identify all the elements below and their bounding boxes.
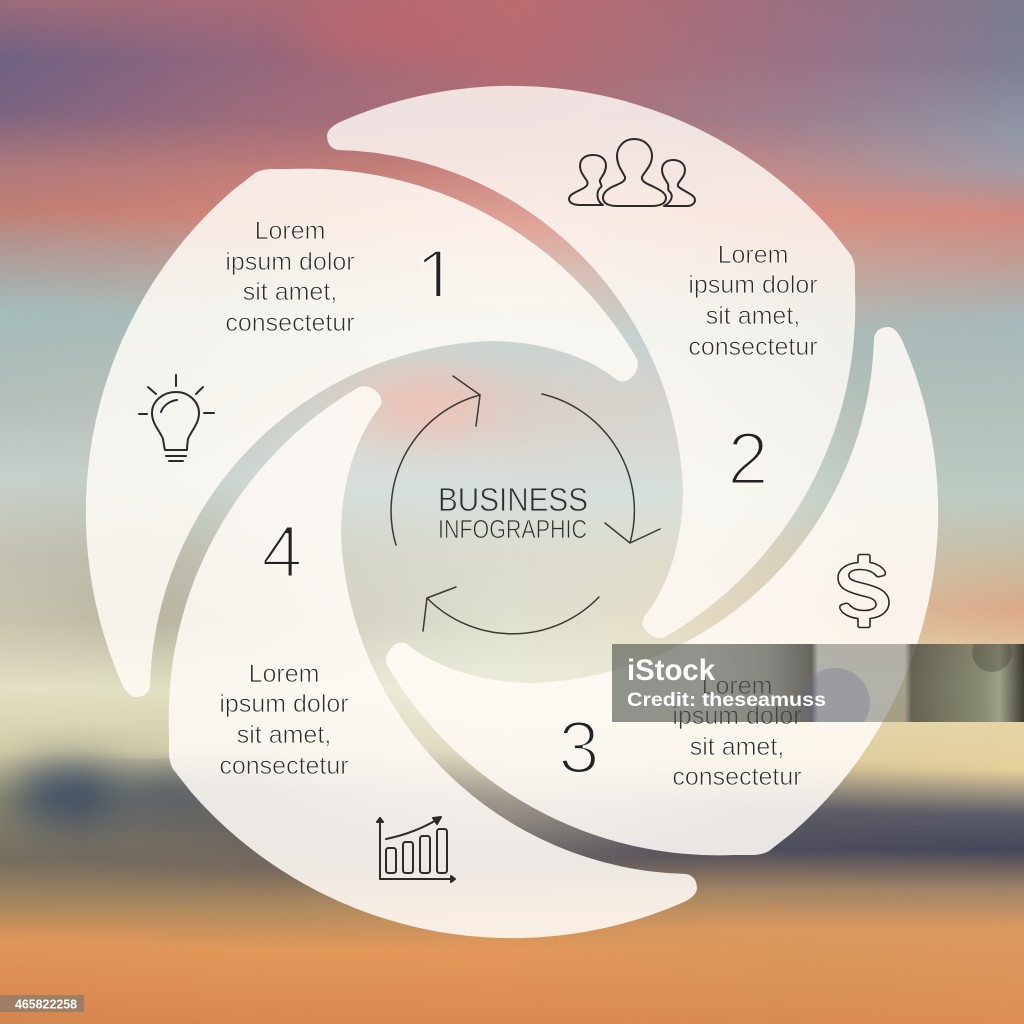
text block 4: sit amet,	[237, 721, 331, 749]
icon: light bulb	[139, 375, 214, 461]
stock id tag	[0, 995, 84, 1012]
cycle arrows	[391, 376, 660, 634]
icon: dollar	[838, 554, 889, 628]
icon: people	[569, 139, 695, 206]
text block 1: consectetur	[225, 309, 355, 337]
number 4: 4	[261, 510, 303, 593]
number 3: 3	[558, 706, 600, 789]
petal 2	[327, 86, 855, 638]
text block 4: consectetur	[219, 752, 349, 780]
petal 4	[169, 386, 697, 938]
arrow: left arc	[391, 376, 480, 545]
centre title	[438, 482, 588, 544]
text block 2: consectetur	[688, 333, 818, 361]
text block 1: Lorem	[255, 217, 325, 245]
text block 3: Lorem	[702, 672, 772, 700]
stock id tag: 465822258	[15, 996, 77, 1012]
text block 4: ipsum dolor	[219, 690, 349, 718]
watermark logo: iStock	[627, 654, 715, 687]
text block 4: Lorem	[249, 660, 319, 688]
text block 1: sit amet,	[243, 278, 337, 306]
title line 2: INFOGRAPHIC	[438, 516, 587, 544]
watermark credit: Credit: theseamuss	[627, 689, 826, 711]
centre glow disc	[142, 142, 882, 882]
text block 2: sit amet,	[706, 302, 800, 330]
petal 3	[386, 327, 938, 855]
background clouds	[15, 14, 495, 821]
text block 3: consectetur	[672, 763, 802, 791]
petal 1	[86, 169, 638, 697]
arrow: right arc	[542, 394, 660, 543]
text block 1: ipsum dolor	[225, 248, 355, 276]
title line 1: BUSINESS	[438, 482, 588, 519]
number 1: 1	[415, 233, 459, 321]
petal diagram	[86, 86, 938, 938]
icon: bar chart	[377, 817, 455, 882]
text block 2: ipsum dolor	[688, 271, 818, 299]
number 2: 2	[727, 417, 769, 500]
watermark band	[612, 644, 1024, 722]
text block 3: ipsum dolor	[672, 702, 802, 730]
arrow: bottom arc	[423, 587, 599, 634]
text block 2: Lorem	[718, 241, 788, 269]
text block 3: sit amet,	[690, 733, 784, 761]
